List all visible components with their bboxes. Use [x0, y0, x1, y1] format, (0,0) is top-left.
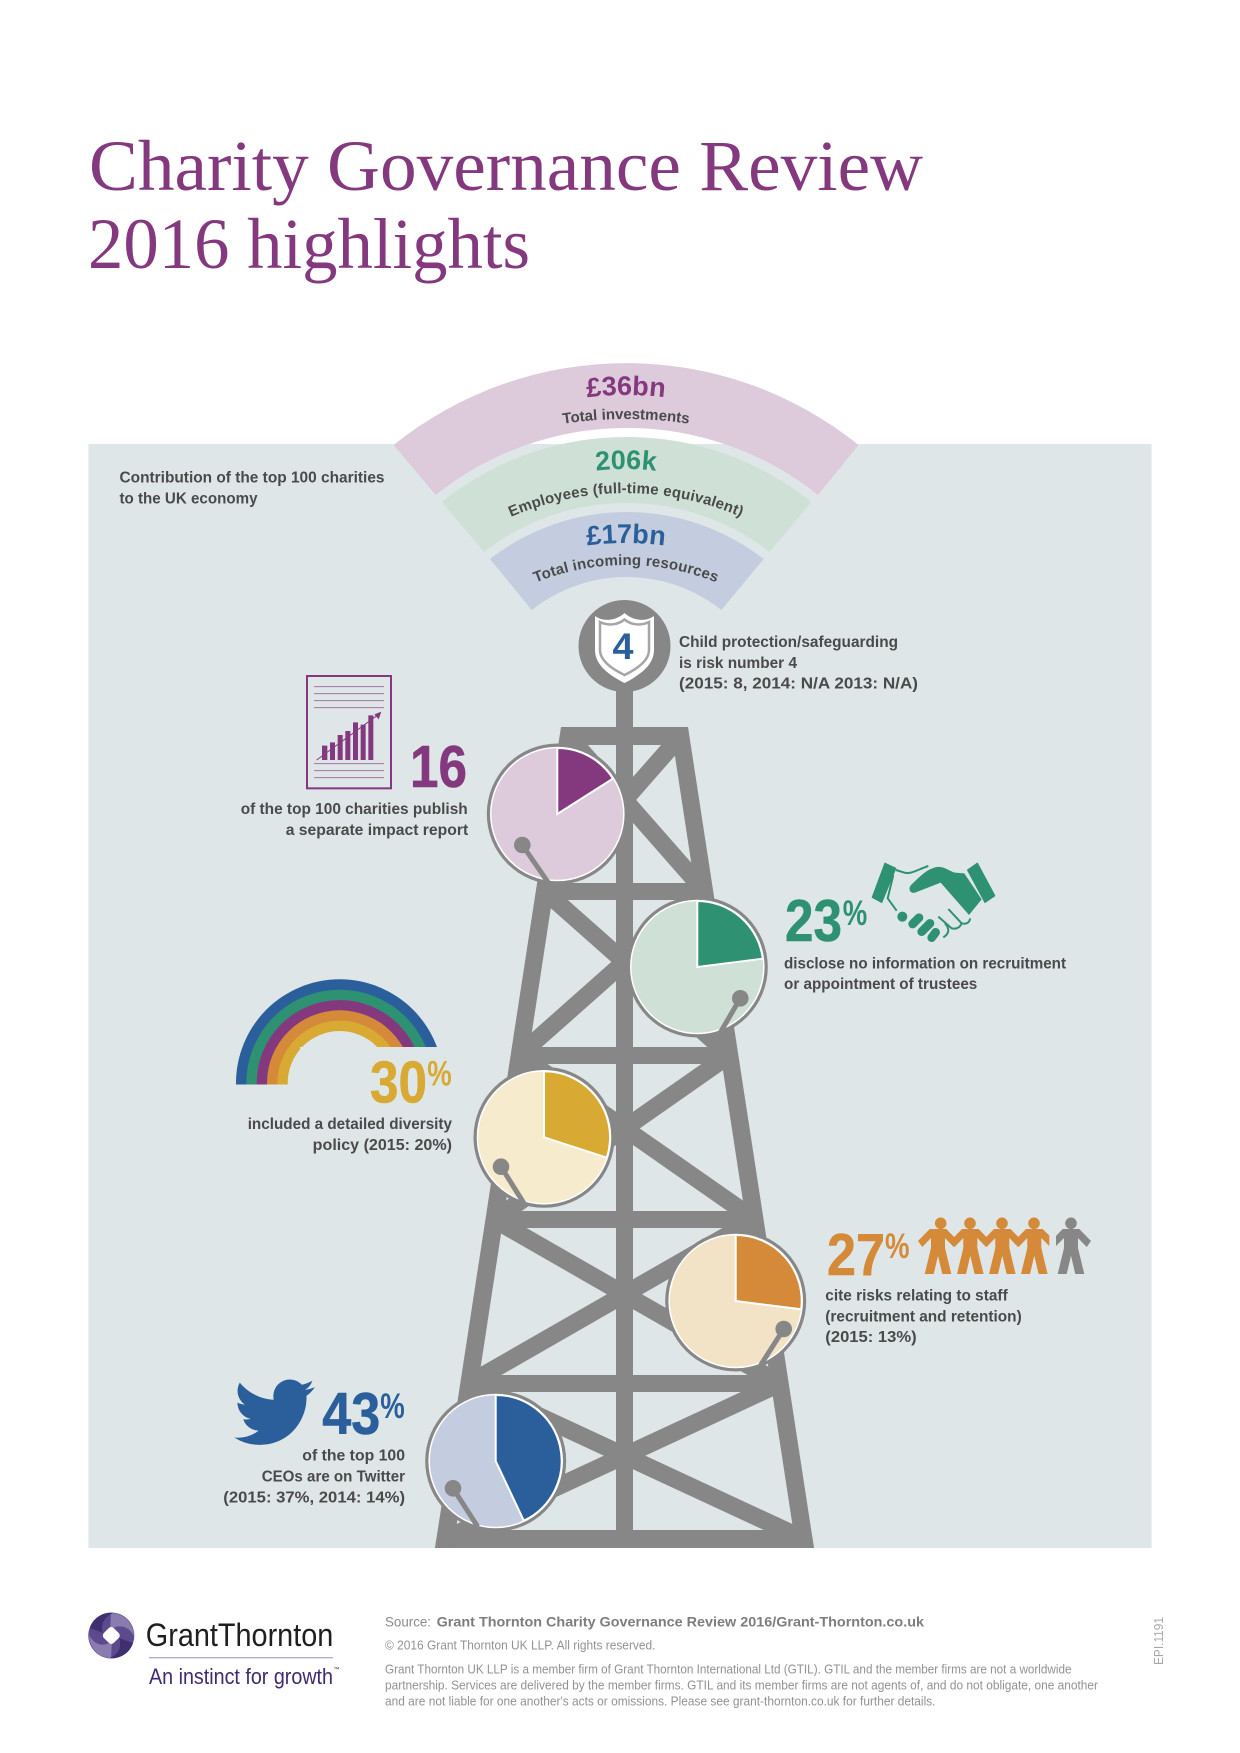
- stat: 30 percent: 30: [370, 1050, 427, 1116]
- stat: 43 percent: [223, 1381, 405, 1506]
- icon: report document: [307, 676, 391, 788]
- pie: 23 percent: [627, 896, 768, 1038]
- band: total incoming resources: Total incoming resources: [532, 554, 718, 582]
- band: total investments: £36bn: [586, 376, 664, 398]
- icon: five people: [918, 1218, 1091, 1274]
- intro text: [120, 470, 385, 508]
- stat: 16 reports: a separate impact report: [286, 822, 469, 839]
- stat: 23 percent: %: [843, 894, 867, 933]
- stat: 30 percent: %: [427, 1055, 452, 1094]
- band: employees: 206k: [596, 450, 657, 471]
- stat: 27 percent: [825, 1222, 1022, 1346]
- band: total investments: Total investments: [562, 408, 689, 424]
- panel: background: [88, 444, 1152, 1548]
- pie: 30 percent: [474, 1067, 614, 1208]
- title: [88, 126, 923, 284]
- text: child protection: is risk number 4: [679, 655, 797, 672]
- logo: Grant Thornton: ™: [334, 1666, 340, 1673]
- band: total incoming resources: £17bn: [586, 524, 664, 546]
- stat: 30 percent: [248, 1050, 452, 1154]
- stat: 43 percent: of the top 100: [302, 1448, 405, 1465]
- stat: 16 reports: [241, 734, 469, 839]
- source and legal text: © 2016 Grant Thornton UK LLP. All rights reserved.: [385, 1638, 656, 1652]
- icon: handshake: [872, 863, 995, 938]
- band: employees: [442, 437, 811, 552]
- source and legal text: and are not liable for one another's acts or omissions. Please see grant-thornton.co.uk for further details.: [385, 1695, 936, 1709]
- intro text: to the UK economy: [120, 490, 258, 508]
- stat: 43 percent: 43: [322, 1381, 380, 1447]
- text: child protection: [679, 634, 918, 692]
- pie: 27 percent: [665, 1230, 806, 1372]
- text: child protection: Child protection/safeguarding: [679, 634, 898, 651]
- source and legal text: Grant Thornton UK LLP is a member firm of Grant Thornton International Ltd (GTIL). GTIL and the member firms are not a worldwide: [385, 1662, 1072, 1676]
- stat: 43 percent: CEOs are on Twitter: [262, 1469, 405, 1486]
- title: Charity Governance Review: [89, 126, 923, 206]
- pie: 16 of 100: [487, 744, 628, 884]
- band: total investments: [394, 363, 858, 495]
- stat: 23 percent: 23: [785, 888, 842, 954]
- stat: 30 percent: included a detailed diversity: [248, 1116, 452, 1133]
- text: child protection: (2015: 8, 2014: N/A 2013: N/A): [679, 676, 918, 692]
- pie: 43 percent: [425, 1390, 566, 1532]
- logo: Grant Thornton: [88, 1612, 340, 1689]
- stat: 16 reports: of the top 100 charities publish: [241, 801, 468, 818]
- fan: contribution bands: [394, 363, 858, 610]
- icon: risk shield: [578, 600, 670, 692]
- reference code: EPI.1191: [1151, 1617, 1166, 1665]
- icon: rainbow: [236, 979, 437, 1084]
- source and legal text: partnership. Services are delivered by the member firms. GTIL and its member firms are not agents of, and do not obligate, one another: [385, 1678, 1098, 1692]
- stat: 27 percent: %: [885, 1227, 910, 1266]
- stat: 27 percent: 27: [827, 1222, 885, 1288]
- icon: risk shield: 4: [612, 626, 634, 667]
- stat: 16 reports: 16: [410, 734, 467, 800]
- stat: 30 percent: policy (2015: 20%): [313, 1137, 452, 1154]
- intro text: Contribution of the top 100 charities: [120, 470, 385, 486]
- icon: twitter bird: [234, 1380, 315, 1445]
- stat: 43 percent: %: [380, 1387, 405, 1426]
- stat: 43 percent: (2015: 37%, 2014: 14%): [223, 1489, 405, 1506]
- source and legal text: Source:: [385, 1614, 431, 1630]
- stat: 23 percent: disclose no information on recruitment: [784, 955, 1067, 972]
- stat: 23 percent: or appointment of trustees: [784, 976, 977, 993]
- band: total incoming resources: [490, 512, 764, 610]
- source and legal text: Grant Thornton Charity Governance Review 2016/Grant-Thornton.co.uk: [437, 1614, 924, 1630]
- stat: 27 percent: (recruitment and retention): [825, 1309, 1022, 1326]
- logo: Grant Thornton: GrantThornton: [146, 1617, 333, 1653]
- band: employees: Employees (full-time equivalent): [508, 482, 743, 518]
- stat: 27 percent: (2015: 13%): [825, 1329, 917, 1346]
- logo: Grant Thornton: An instinct for growth: [149, 1664, 333, 1689]
- title: 2016 highlights: [88, 204, 530, 284]
- source and legal text: [385, 1614, 1098, 1709]
- stat: 27 percent: cite risks relating to staff: [825, 1288, 1008, 1305]
- stat: 23 percent: [784, 888, 1067, 993]
- tower: [435, 650, 814, 1548]
